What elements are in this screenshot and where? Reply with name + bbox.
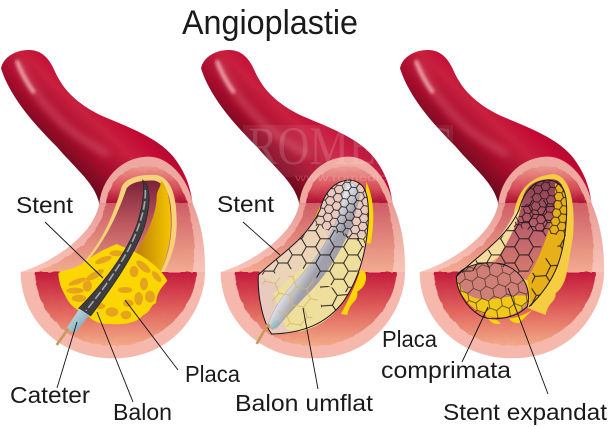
- artery section 2: [201, 50, 405, 358]
- watermark: www.romedic.ro: [293, 173, 406, 184]
- artery section 1: [1, 50, 205, 358]
- plaque blob: [58, 244, 167, 324]
- inflated balloon with stent mesh: [257, 180, 373, 344]
- plaque and deflated balloon on catheter: [57, 175, 177, 345]
- label Stent: Stent: [217, 191, 275, 217]
- label Balon: Balon: [113, 399, 172, 425]
- leader lines: [45, 222, 178, 402]
- watermark: ROMEDIC: [248, 116, 452, 176]
- label Placa: Placa: [382, 326, 437, 352]
- label comprimata: comprimata: [381, 357, 511, 383]
- label Cateter: Cateter: [10, 382, 90, 408]
- leader lines: [462, 288, 548, 394]
- label Stent: Stent: [16, 192, 74, 218]
- label Placa: Placa: [185, 361, 240, 387]
- compressed plaque and expanded stent: [456, 174, 574, 324]
- artery section 3: [400, 50, 604, 358]
- panel: inflated balloon: [201, 50, 405, 416]
- label Stent expandat: Stent expandat: [443, 399, 608, 425]
- label Balon umflat: Balon umflat: [235, 390, 374, 416]
- leader lines: [243, 222, 318, 389]
- panel: catheter with stent before dilation: [1, 50, 240, 425]
- panel: expanded stent: [381, 50, 608, 425]
- title: Angioplastie: [182, 4, 358, 42]
